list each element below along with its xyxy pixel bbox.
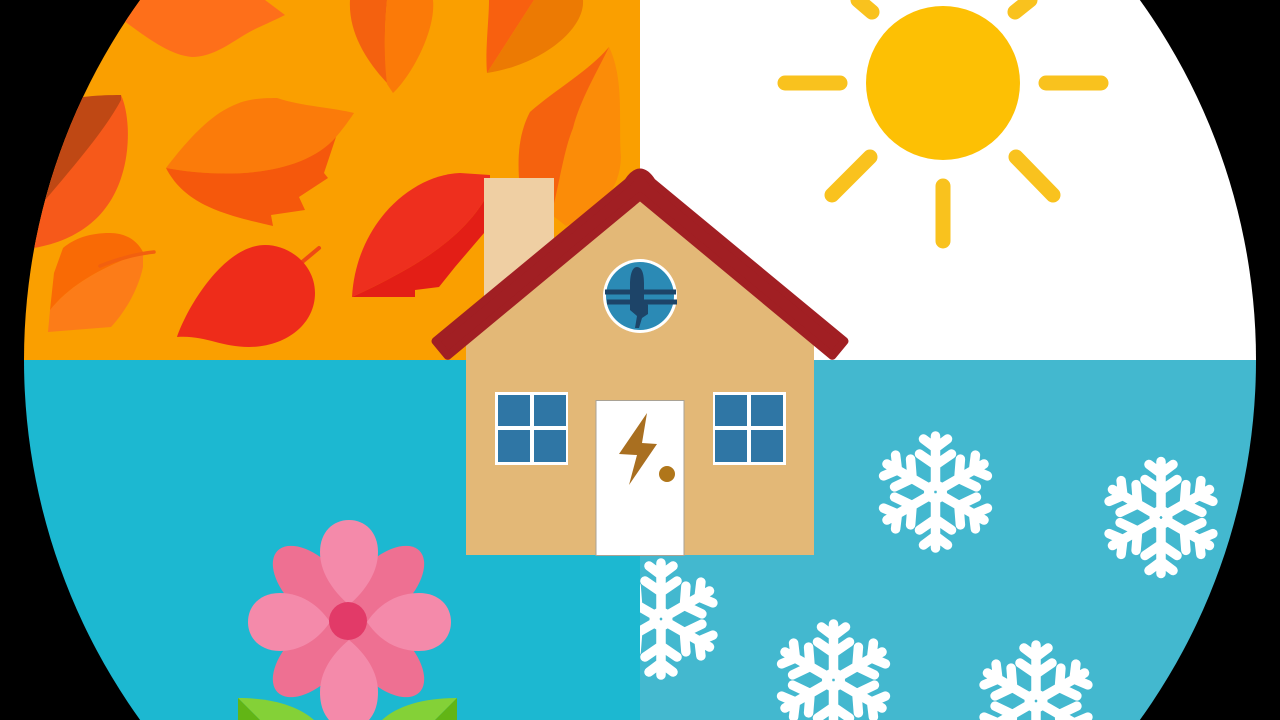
icon: snowflake 1 <box>879 436 992 548</box>
leaf: top left <box>120 0 285 57</box>
door knob <box>659 466 675 482</box>
icon: snowflake 5 <box>980 645 1092 720</box>
icon: snowflake 4 <box>777 624 890 720</box>
roof <box>436 172 844 356</box>
chimney <box>484 178 554 303</box>
leaf: far left <box>34 95 128 248</box>
icon: snowflake 2 <box>1105 462 1217 574</box>
panel: spring quadrant <box>0 360 640 720</box>
icon: sun <box>785 0 1101 241</box>
leaf: lower left <box>48 233 154 332</box>
flower back petals <box>272 546 424 698</box>
panel: winter quadrant <box>605 360 1280 720</box>
flower front petals <box>248 520 451 720</box>
flower leaves <box>238 698 457 720</box>
house <box>436 172 844 556</box>
icon: snowflake 3 <box>640 558 718 680</box>
flower centre <box>329 602 367 640</box>
leaf: top right <box>486 0 583 73</box>
panel: summer quadrant <box>640 0 1280 360</box>
icon: flower <box>238 520 457 720</box>
panel: autumn quadrant <box>0 0 640 360</box>
leaf: top centre <box>350 0 433 93</box>
leaf: large centre <box>166 98 354 226</box>
left window <box>495 392 568 465</box>
leaf: behind chimney <box>519 47 621 226</box>
wall <box>466 201 814 555</box>
leaf: red with stem <box>177 245 319 347</box>
round attic window <box>603 259 677 333</box>
leaf: large red <box>352 173 490 297</box>
icon: lightning bolt <box>619 413 657 485</box>
right window <box>713 392 786 465</box>
door <box>596 400 684 556</box>
